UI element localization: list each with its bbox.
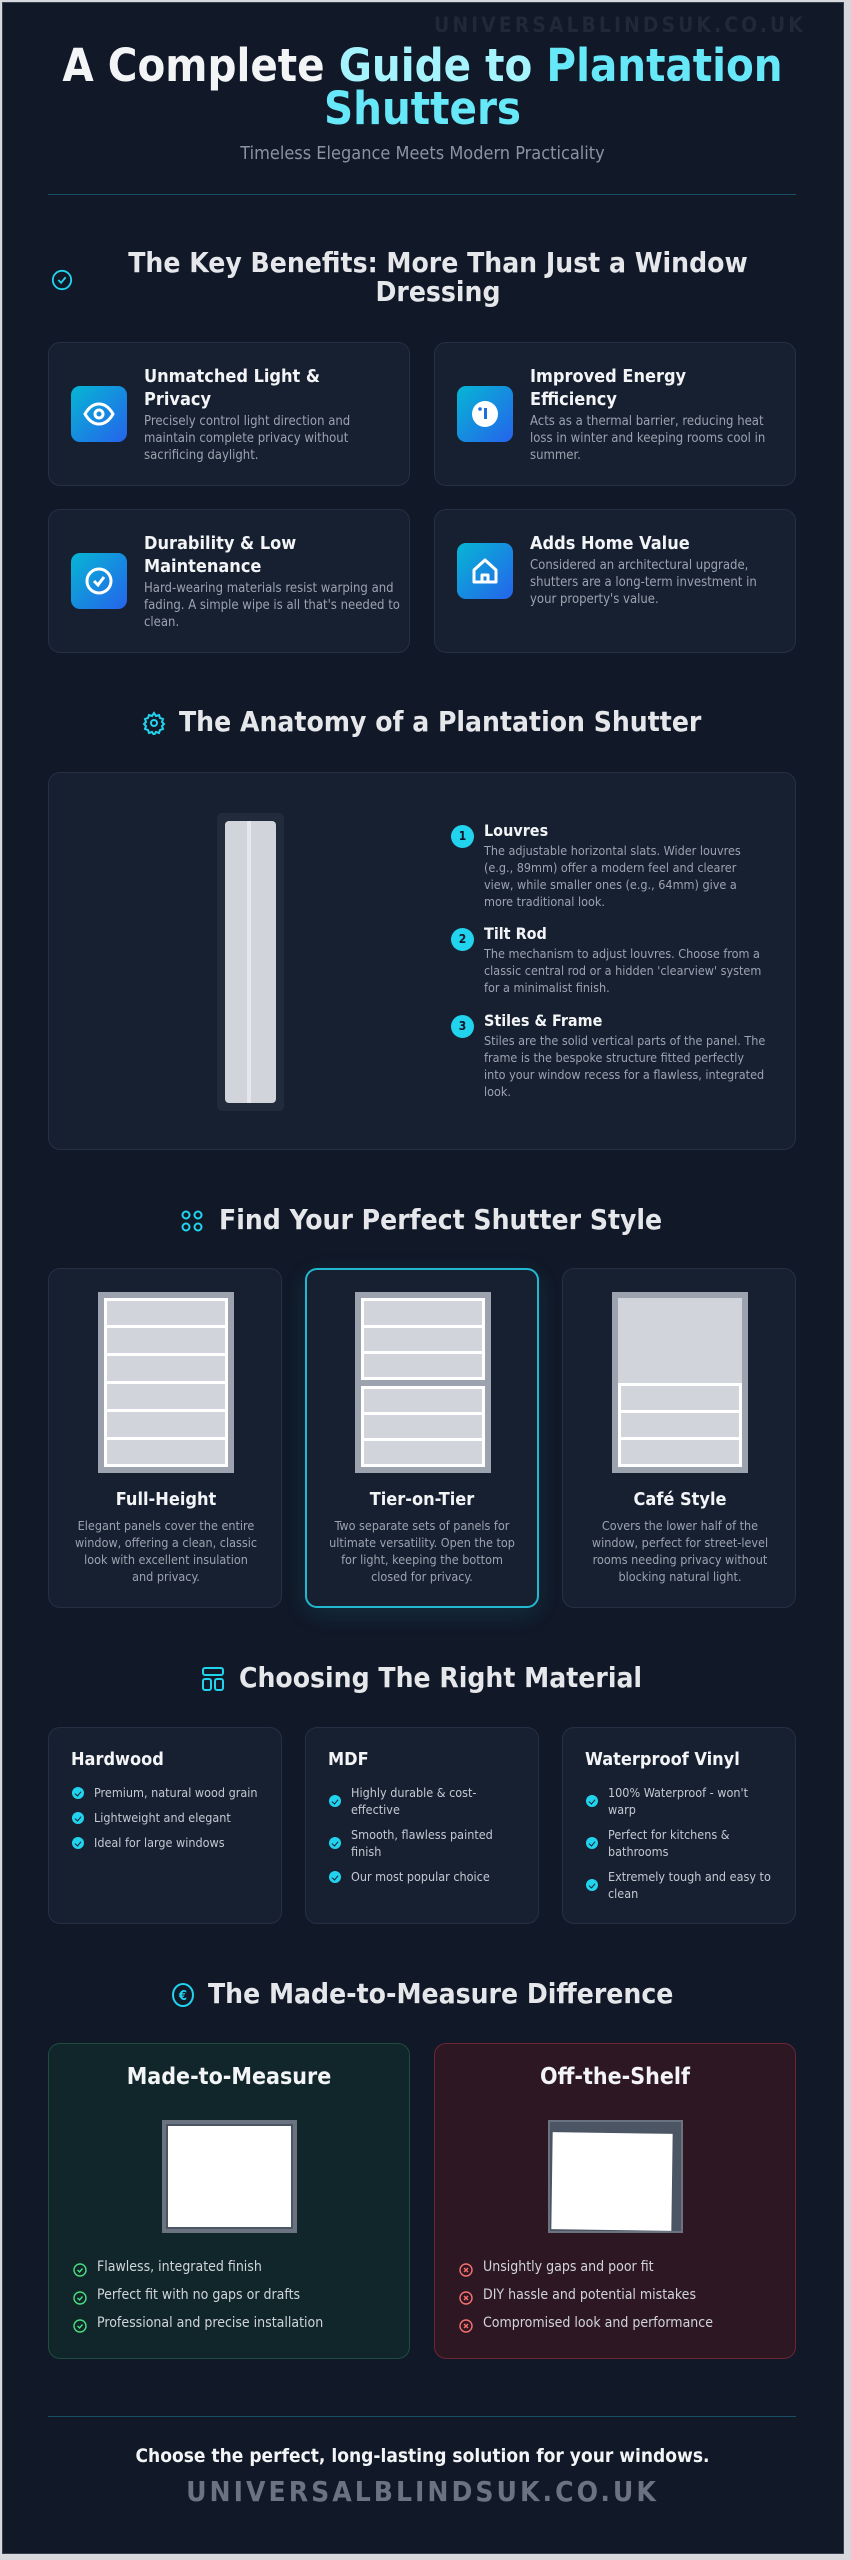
icon: gear — [142, 711, 166, 735]
panel: benefit durability: Hard-wearing materials resist warping and fading. A simple wipe is all that's needed to clean. — [144, 581, 400, 630]
panel: benefit light & privacy — [48, 342, 410, 486]
panel: full-height: Full-Height — [116, 1489, 216, 1510]
icon: thermometer — [457, 386, 513, 442]
panel: hardwood: Premium, natural wood grain — [94, 1785, 257, 1800]
panel: vinyl: 100% Waterproof - won't warp — [608, 1785, 748, 1817]
panel: benefit energy — [434, 342, 796, 486]
panel: benefit durability: Durability & Low — [144, 533, 296, 554]
panel: cafe: Covers the lower half of the window, perfect for street-level rooms needing privacy without blocking natural light. — [592, 1518, 768, 1584]
item tilt rod — [451, 924, 761, 995]
panel: tier-on-tier: Two separate sets of panels for ultimate versatility. Open the top for light, keeping the bottom closed for privacy. — [329, 1518, 515, 1584]
panel: benefit home value: Adds Home Value — [530, 533, 690, 554]
panel: vinyl: Waterproof Vinyl — [585, 1749, 740, 1770]
window graphic fitted — [162, 2120, 297, 2233]
icon: layout — [202, 1667, 224, 1691]
item tilt rod: 2 — [459, 932, 466, 946]
panel: full-height: Elegant panels cover the entire window, offering a clean, classic look with excellent insulation and privacy. — [75, 1518, 257, 1584]
item tilt rod: The mechanism to adjust louvres. Choose from a classic central rod or a hidden 'clearview' system for a minimalist finish. — [484, 946, 761, 995]
list cons: Unsightly gaps and poor fit — [483, 2259, 654, 2275]
window graphic tier — [355, 1292, 491, 1473]
window graphic cafe — [612, 1292, 748, 1473]
heading: material: Choosing The Right Material — [239, 1661, 642, 1694]
panel: benefit durability — [48, 509, 410, 653]
panel: benefit home value — [434, 509, 796, 653]
panel: hardwood: Lightweight and elegant — [94, 1810, 231, 1825]
icon: check circle — [52, 270, 72, 290]
list cons: Compromised look and performance — [483, 2315, 713, 2331]
panel: benefit home value: Considered an architectural upgrade, shutters are a long-term investment in your property's value. — [530, 558, 757, 607]
panel: hardwood: Ideal for large windows — [94, 1835, 225, 1850]
panel: mdf — [305, 1727, 539, 1924]
heading: made-to-measure: The Made-to-Measure Difference — [208, 1977, 673, 2010]
panel: hardwood — [48, 1727, 282, 1924]
list pros: Flawless, integrated finish — [97, 2259, 262, 2275]
item stiles — [451, 1011, 765, 1099]
panel: full-height — [48, 1268, 282, 1608]
panel: tier-on-tier: Tier-on-Tier — [370, 1489, 474, 1510]
list cons — [459, 2259, 713, 2333]
panel: benefit energy: Acts as a thermal barrier, reducing heat loss in winter and keeping rooms cool in summer. — [530, 414, 765, 463]
icon: house — [457, 543, 513, 599]
shutter diagram — [217, 813, 284, 1111]
item louvres: The adjustable horizontal slats. Wider louvres (e.g., 89mm) offer a modern feel and clearer view, while smaller ones (e.g., 64mm) give a more traditional look. — [484, 843, 741, 909]
item louvres — [451, 821, 741, 909]
list pros — [73, 2259, 323, 2333]
watermark top: UNIVERSALBLINDSUK.CO.UK — [434, 13, 806, 37]
panel: vinyl — [562, 1727, 796, 1924]
panel: benefit durability: Maintenance — [144, 556, 261, 577]
panel: mdf: Highly durable & cost-effective — [351, 1785, 476, 1817]
heading: key benefits: The Key Benefits: More Than Just a Window Dressing — [128, 246, 748, 308]
panel: benefit light & privacy: Precisely control light direction and maintain complete privacy without sacrificing daylight. — [144, 414, 350, 463]
subtitle: Timeless Elegance Meets Modern Practicality — [240, 143, 605, 164]
panel: benefit energy: Improved Energy — [530, 366, 686, 387]
icon: grid — [182, 1210, 202, 1232]
item stiles: Stiles & Frame — [484, 1011, 602, 1030]
icon: coin — [172, 1983, 194, 2007]
heading: style: Find Your Perfect Shutter Style — [219, 1203, 662, 1236]
panel: mdf: Our most popular choice — [351, 1869, 490, 1884]
item stiles: Stiles are the solid vertical parts of the panel. The frame is the bespoke structure fitted perfectly into your window recess for a flawless, integrated look. — [484, 1033, 765, 1099]
icon: check — [71, 553, 127, 609]
title: A Complete Guide to Plantation — [62, 39, 783, 92]
item stiles: 3 — [459, 1019, 466, 1033]
item louvres: Louvres — [484, 821, 548, 840]
panel: made-to-measure: Made-to-Measure — [127, 2064, 331, 2090]
panel: benefit energy: Efficiency — [530, 389, 617, 410]
panel: mdf: Smooth, flawless painted finish — [351, 1827, 493, 1859]
item louvres: 1 — [459, 829, 466, 843]
panel: cafe — [562, 1268, 796, 1608]
icon: eye — [71, 386, 127, 442]
heading: anatomy: The Anatomy of a Plantation Shutter — [179, 705, 701, 738]
item tilt rod: Tilt Rod — [484, 924, 547, 943]
list cons: DIY hassle and potential mistakes — [483, 2287, 696, 2303]
panel: off-the-shelf — [434, 2043, 796, 2359]
title: Shutters — [324, 82, 521, 135]
icon: coin: € — [178, 1989, 187, 2004]
window graphic full height — [98, 1292, 234, 1473]
panel: anatomy — [48, 772, 796, 1150]
window graphic ill-fitting — [548, 2120, 683, 2233]
panel: benefit light & privacy: Unmatched Light & — [144, 366, 320, 387]
title — [62, 39, 783, 135]
list pros: Perfect fit with no gaps or drafts — [97, 2287, 300, 2303]
list pros: Professional and precise installation — [97, 2315, 323, 2331]
footer tagline: Choose the perfect, long-lasting solution for your windows. — [136, 2445, 710, 2467]
footer watermark: UNIVERSALBLINDSUK.CO.UK — [186, 2475, 659, 2508]
panel: off-the-shelf: Off-the-Shelf — [540, 2064, 690, 2090]
panel: cafe: Café Style — [634, 1489, 726, 1510]
panel: vinyl: Extremely tough and easy to clean — [608, 1869, 771, 1901]
panel: benefit light & privacy: Privacy — [144, 389, 211, 410]
panel: mdf: MDF — [328, 1749, 369, 1770]
panel: tier-on-tier — [305, 1268, 539, 1608]
panel: made-to-measure — [48, 2043, 410, 2359]
panel: vinyl: Perfect for kitchens & bathrooms — [608, 1827, 730, 1859]
panel: hardwood: Hardwood — [71, 1749, 164, 1770]
